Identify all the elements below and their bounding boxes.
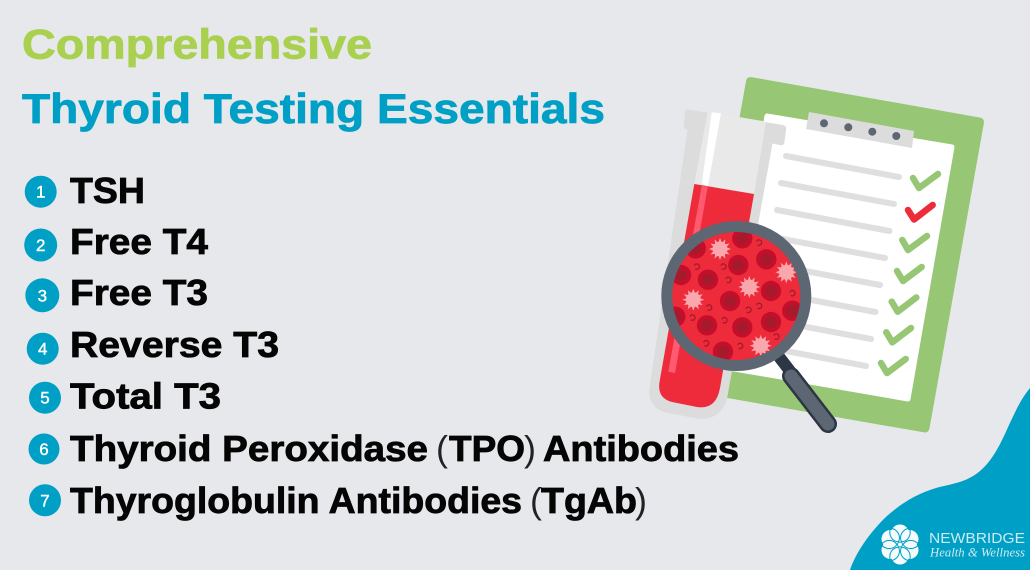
test tube bbox=[649, 109, 786, 419]
item 6 bbox=[28, 428, 739, 469]
illustration: clipboard, test tube and magnifier bbox=[649, 82, 980, 428]
item 6: 6 bbox=[39, 440, 49, 459]
item 5: Total T3 bbox=[70, 376, 221, 416]
item 3: Free T3 bbox=[70, 272, 208, 313]
test list bbox=[24, 170, 739, 521]
lens with blood cells bbox=[665, 226, 806, 366]
item 1 bbox=[25, 170, 145, 211]
item 1: 1 bbox=[36, 183, 45, 202]
item 7: 7 bbox=[40, 491, 50, 510]
title line: Thyroid Testing Essentials: Thyroid Testing Essentials bbox=[22, 85, 605, 132]
item 4: Reverse T3 bbox=[70, 324, 279, 365]
item 6: ) bbox=[524, 428, 536, 469]
item 4: 4 bbox=[38, 340, 47, 359]
clipboard bbox=[696, 82, 980, 428]
item 7: Thyroglobulin Antibodies bbox=[70, 480, 522, 521]
logo: Newbridge Health & Wellness bbox=[878, 524, 1025, 564]
item 6: TPO bbox=[449, 428, 525, 469]
logo mark: mandala bbox=[878, 524, 922, 564]
item 3: 3 bbox=[38, 286, 47, 305]
magnifying glass bbox=[665, 226, 828, 424]
title bbox=[22, 20, 605, 132]
item 7: ( bbox=[530, 480, 542, 521]
item 6: Antibodies bbox=[543, 428, 739, 469]
item 1: TSH bbox=[70, 170, 145, 211]
item 5: 5 bbox=[40, 389, 50, 408]
item 6: ( bbox=[436, 428, 448, 469]
title line: Comprehensive: Comprehensive bbox=[22, 20, 372, 68]
item 6: Thyroid Peroxidase bbox=[70, 428, 428, 469]
item 7: TgAb bbox=[541, 480, 637, 521]
corner blob bbox=[850, 388, 1030, 570]
item 2: Free T4 bbox=[70, 221, 208, 262]
item 2 bbox=[24, 221, 208, 262]
item 7: ) bbox=[635, 480, 647, 521]
handle bbox=[780, 358, 828, 424]
logo tagline: Health & Wellness bbox=[929, 544, 1025, 560]
item 2: 2 bbox=[36, 236, 45, 255]
logo wordmark: NEWBRIDGE bbox=[929, 530, 1025, 547]
